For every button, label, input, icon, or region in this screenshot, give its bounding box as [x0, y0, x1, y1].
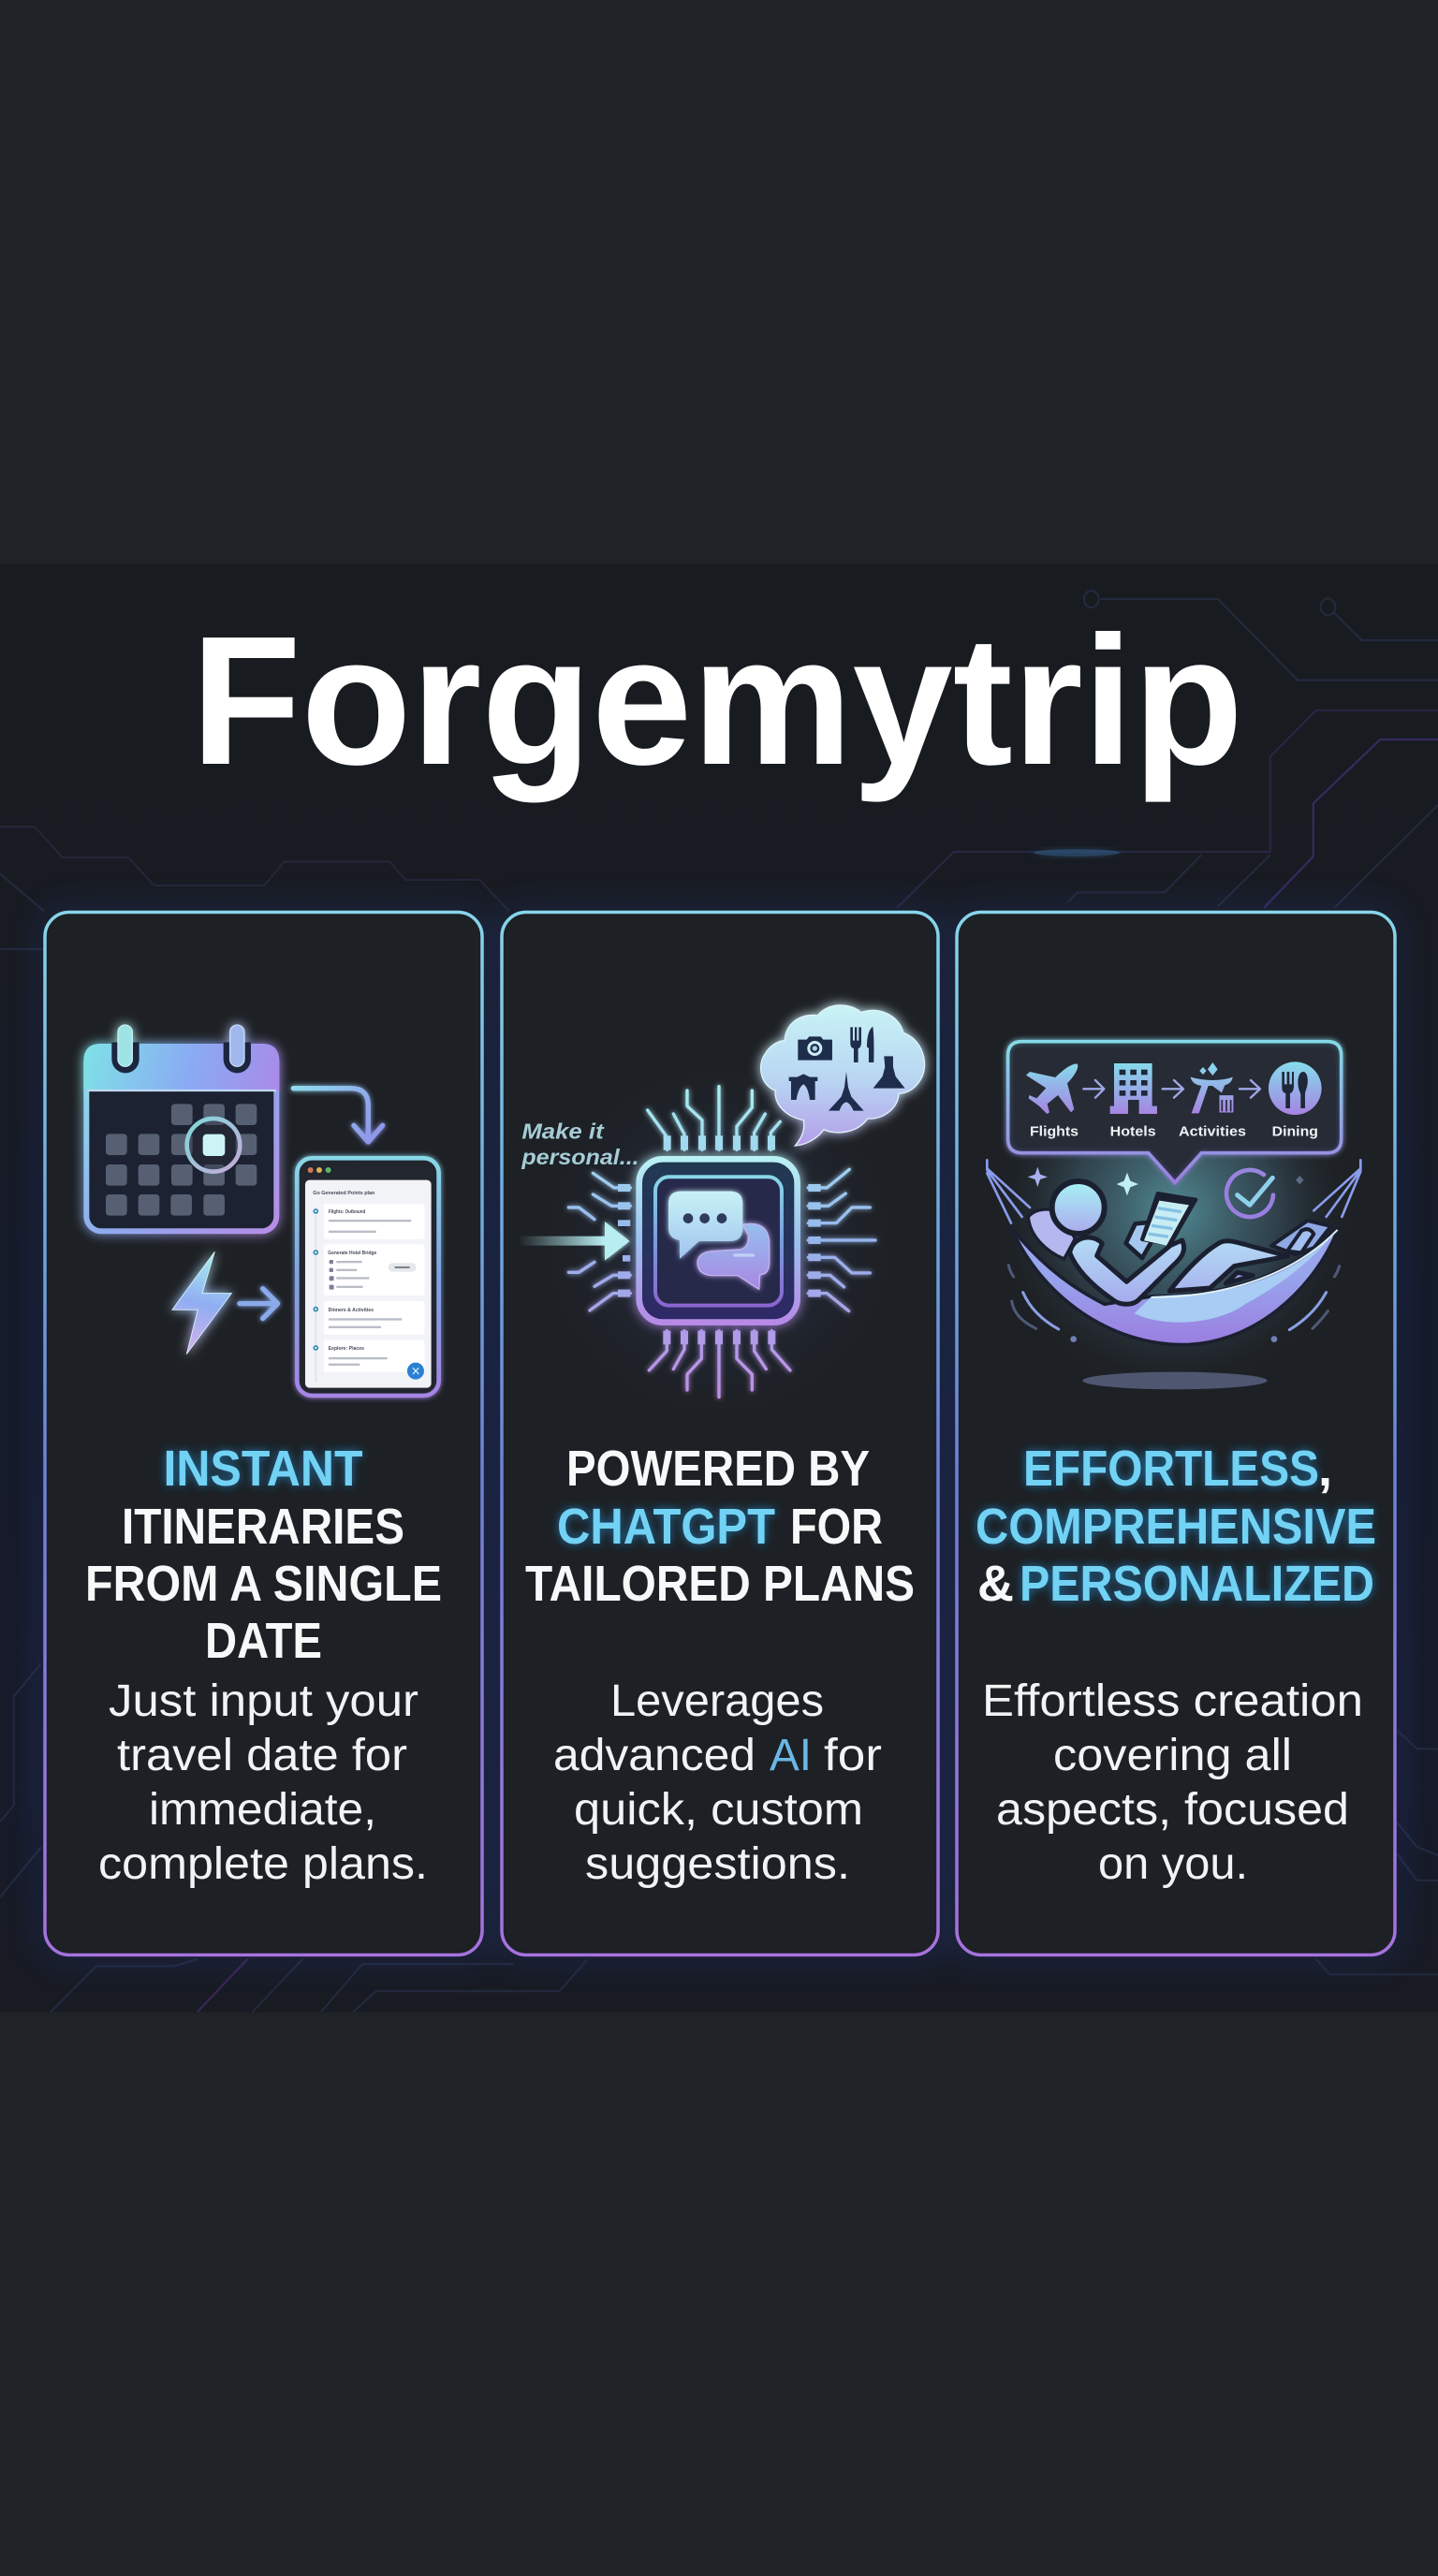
callout: trip stages [1008, 1042, 1342, 1182]
description: powered by chatgpt: quick, custom [574, 1785, 863, 1835]
icon: dining [1269, 1061, 1322, 1115]
panel: effortless and comprehensive [957, 912, 1395, 1954]
description: instant itineraries: immediate, [149, 1785, 376, 1835]
heading: effortless, comprehensive: COMPREHENSIVE [976, 1499, 1376, 1555]
icon: phone itinerary: Flights: Outbound [329, 1209, 366, 1215]
small dots [1070, 1336, 1277, 1342]
icon: check mark [1226, 1170, 1273, 1217]
heading: powered by chatgpt: FOR [790, 1499, 883, 1555]
icon: activities [1191, 1062, 1234, 1113]
chip traces [568, 1087, 875, 1398]
icon: person head [1052, 1181, 1105, 1234]
motion marks [1008, 1266, 1340, 1330]
heading: powered by chatgpt: TAILORED PLANS [525, 1556, 915, 1612]
description: effortless creation: on you. [1098, 1839, 1248, 1889]
description: powered by chatgpt: advanced [553, 1731, 756, 1780]
chip body [639, 1159, 798, 1323]
label: make it personal: Make it [521, 1120, 605, 1144]
icon: phone itinerary: Generate Hotel Bridge [328, 1251, 376, 1256]
icon: phone itinerary: Dinners & Activities [329, 1308, 374, 1313]
central dark band [0, 564, 1438, 2012]
icon: phone itinerary: Go Generated Points plan [313, 1191, 375, 1196]
hammock fabric [1011, 1228, 1339, 1345]
icon: thought cloud [761, 1005, 925, 1146]
heading: instant itineraries: DATE [205, 1613, 322, 1669]
icon: person pillow [1028, 1209, 1075, 1259]
card frame 2 [502, 912, 938, 1954]
heading: instant itineraries: FROM A SINGLE [85, 1556, 442, 1612]
label: make it personal: personal... [521, 1145, 639, 1169]
stage arrows [1083, 1080, 1260, 1098]
hammock ropes [987, 1160, 1360, 1223]
chip pads [618, 1135, 821, 1344]
description: effortless creation [982, 1676, 1363, 1889]
icon: person body [1070, 1237, 1184, 1304]
heading: effortless, comprehensive: PERSONALIZED [1020, 1556, 1374, 1612]
hammock shadow [1082, 1372, 1268, 1389]
stage labels: Hotels [1110, 1124, 1156, 1139]
icon: chat bubbles [668, 1192, 770, 1289]
stage labels [1030, 1124, 1318, 1139]
description: powered by chatgpt: suggestions. [585, 1839, 850, 1889]
label: make it personal [521, 1120, 639, 1169]
sparkles [1028, 1167, 1304, 1195]
description: effortless creation: Effortless creation [982, 1676, 1363, 1726]
description: powered by chatgpt: Leverages [610, 1676, 824, 1726]
stage labels: Flights [1030, 1124, 1078, 1139]
heading: effortless, comprehensive: , [1318, 1441, 1332, 1497]
heading: instant itineraries: ITINERARIES [122, 1499, 404, 1555]
description: powered by chatgpt [553, 1676, 882, 1889]
heading: powered by chatgpt: POWERED BY [566, 1441, 870, 1497]
title: Forgemytrip [191, 598, 1243, 803]
arrow: input to chip [518, 1222, 630, 1261]
icon: tablet [1142, 1193, 1196, 1246]
card frame 3 [957, 912, 1395, 1954]
heading: instant itineraries [85, 1441, 442, 1669]
description: powered by chatgpt: AI [770, 1731, 812, 1780]
icon: person leg [1169, 1241, 1288, 1291]
card frame 1 [45, 912, 482, 1954]
description: instant itineraries [98, 1676, 428, 1889]
icon: lightning bolt [172, 1251, 231, 1354]
description: powered by chatgpt: for [824, 1731, 882, 1780]
chip glow [520, 1042, 918, 1442]
icon: plane [1026, 1063, 1078, 1114]
heading: effortless, comprehensive: EFFORTLESS [1023, 1441, 1319, 1497]
icon: hotel [1110, 1063, 1157, 1114]
icon: calendar [83, 1025, 279, 1231]
panel: instant itineraries [45, 912, 482, 1954]
teal glow [986, 1023, 1360, 1398]
description: effortless creation: aspects, focused [996, 1785, 1349, 1835]
heading: effortless, comprehensive: & [977, 1556, 1014, 1612]
description: instant itineraries: complete plans. [98, 1839, 428, 1889]
description: instant itineraries: Just input your [109, 1676, 418, 1726]
icon: phone itinerary [297, 1158, 439, 1396]
illustration: calendar, bolt and phone [83, 1025, 439, 1396]
arrow: calendar to phone [293, 1089, 383, 1142]
icon: phone itinerary: Explore: Places [329, 1346, 364, 1352]
illustration: ai chip [518, 1005, 925, 1442]
stage labels: Activities [1179, 1124, 1246, 1139]
arrow: bolt to phone [240, 1289, 278, 1319]
illustration: hammock and itinerary [986, 1023, 1360, 1398]
heading: powered by chatgpt: CHATGPT [557, 1499, 775, 1555]
panel: powered by chatgpt [502, 912, 938, 1954]
icon: hand [1126, 1222, 1154, 1258]
heading: powered by chatgpt [525, 1441, 915, 1612]
heading: effortless, comprehensive [976, 1441, 1376, 1612]
description: effortless creation: covering all [1053, 1731, 1292, 1780]
stage labels: Dining [1272, 1124, 1318, 1139]
description: instant itineraries: travel date for [117, 1731, 407, 1780]
heading: instant itineraries: INSTANT [163, 1441, 363, 1497]
raised foot [1271, 1221, 1331, 1254]
